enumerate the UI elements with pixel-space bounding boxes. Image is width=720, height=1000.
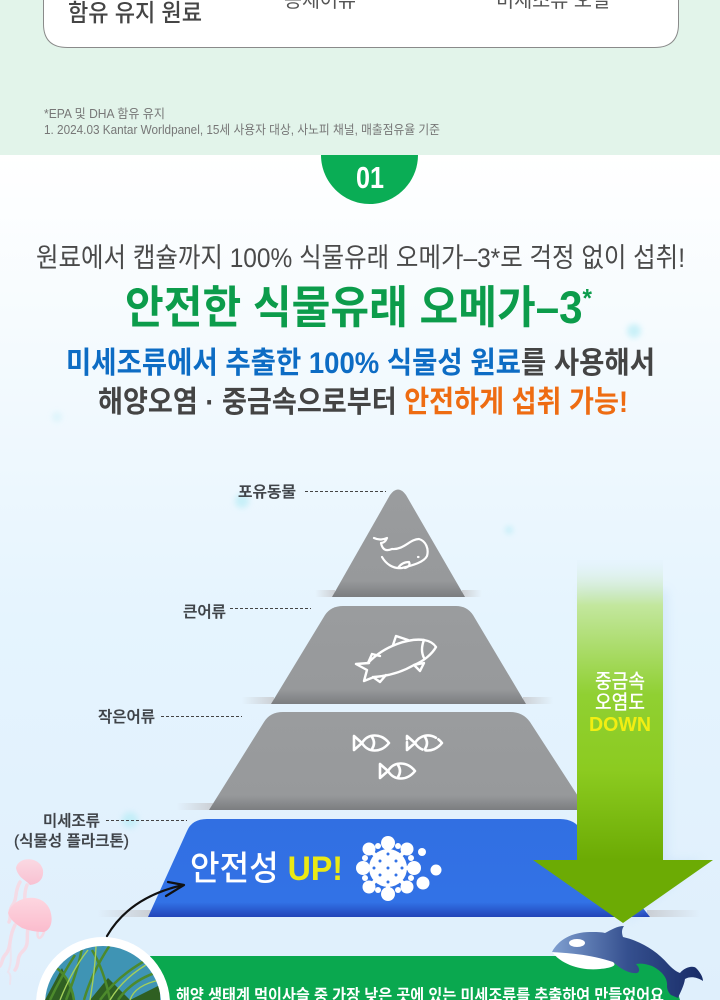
tier 3: small fish bbox=[209, 712, 587, 810]
tier shadows bbox=[97, 590, 701, 917]
arrow label: DOWN bbox=[589, 714, 651, 736]
section background: upper green bbox=[0, 0, 720, 155]
tier 1: mammals bbox=[332, 490, 465, 597]
footnotes: 1. 2024.03 Kantar Worldpanel, 15세 사용자 대상, 사노피 채널, 매출점유율 기준 bbox=[44, 123, 440, 137]
decorative bubbles bbox=[52, 324, 641, 828]
description line 1: 미세조류에서 추출한 100% 식물성 원료를 사용해서 bbox=[66, 347, 655, 380]
label: small fish: 작은어류 bbox=[98, 708, 155, 726]
tier 4: microalgae bbox=[148, 819, 650, 917]
green caption bar bbox=[150, 956, 680, 1000]
arrow label bbox=[589, 670, 651, 736]
icon: microalgae cell bbox=[356, 836, 442, 901]
number badge 01: 01 bbox=[356, 160, 384, 195]
down arrow: heavy metal contamination bbox=[533, 560, 713, 923]
label: large fish: 큰어류 bbox=[183, 603, 226, 621]
description line 2: 해양오염 · 중금속으로부터 안전하게 섭취 가능! bbox=[98, 386, 628, 419]
row heading: 함유 유지 원료 bbox=[68, 0, 202, 27]
icon: small fish group bbox=[354, 736, 442, 778]
pyramid chart bbox=[97, 490, 701, 917]
comparison table card bbox=[44, 0, 678, 48]
main title: * bbox=[583, 283, 593, 313]
label: microalgae bbox=[14, 812, 187, 850]
jellyfish bbox=[0, 859, 52, 984]
label: microalgae: 미세조류 bbox=[43, 812, 100, 830]
arrow: from photo to microalgae bbox=[107, 882, 184, 936]
orca bbox=[552, 926, 703, 998]
arrow label: 오염도 bbox=[595, 691, 645, 714]
footnotes bbox=[44, 107, 440, 137]
icon: whale bbox=[374, 538, 428, 568]
icon: fish bbox=[356, 636, 436, 682]
number badge 01 bbox=[321, 155, 418, 204]
tier labels with leaders bbox=[14, 484, 386, 850]
tier 2: large fish bbox=[271, 606, 526, 704]
label: mammals: 포유동물 bbox=[238, 484, 296, 501]
footnotes: *EPA 및 DHA 함유 유지 bbox=[44, 107, 165, 121]
main title: 안전한 식물유래 오메가–3 bbox=[125, 282, 614, 333]
label: microalgae: (식물성 플라크톤) bbox=[14, 832, 129, 850]
tier 4 label: 안전성 UP! bbox=[190, 850, 343, 888]
label: large fish bbox=[183, 603, 311, 621]
arrow label: 중금속 bbox=[595, 670, 645, 693]
photo: seagrass circle bbox=[36, 937, 170, 1000]
